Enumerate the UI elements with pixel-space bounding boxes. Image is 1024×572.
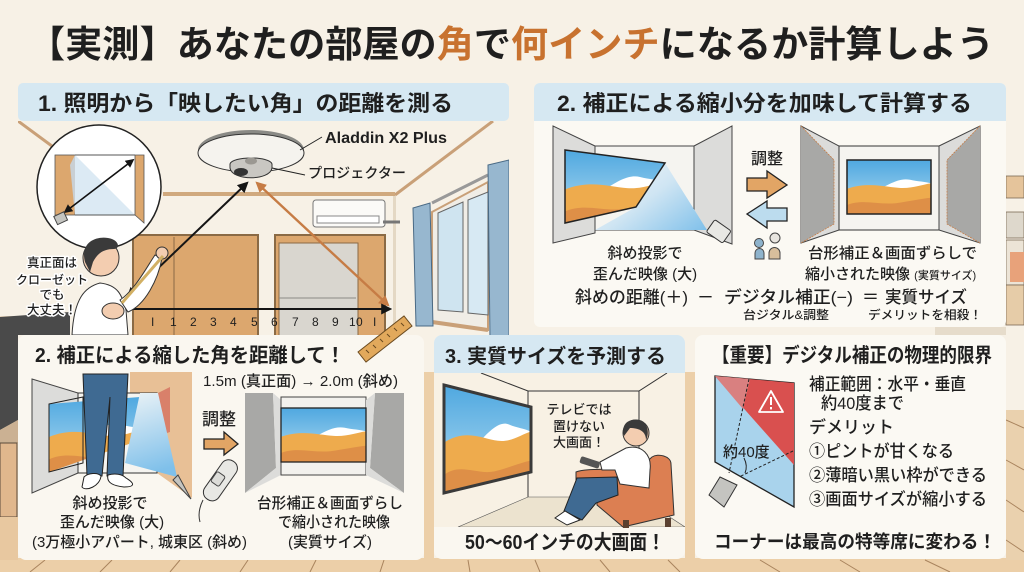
person on armchair (555, 420, 674, 528)
correction range (809, 375, 966, 413)
header: step 2: 2. 補正による縮小分を加味して計算する (557, 91, 972, 116)
caption: skewed: 斜め投影で (607, 244, 683, 262)
icon: ruler (358, 316, 412, 362)
formula: デメリットを相殺！ (868, 307, 982, 322)
panel: room measurement (16, 83, 509, 341)
inset circle: closet corner (37, 125, 161, 249)
tape scale numbers: I12345678910I (151, 315, 376, 329)
formula: デジタル補正(−) (724, 287, 853, 307)
header: step 3: 3. 実質サイズを予測する (445, 344, 666, 368)
caption: 50〜60インチの大画面！ (465, 531, 665, 554)
heading: 【重要】デジタル補正の物理的限界 (712, 343, 992, 367)
title: 【実測】あなたの部屋の角で何インチになるか計算しよう (28, 24, 994, 65)
caption: skewed: 歪んだ映像 (大) (593, 266, 697, 283)
caption: corrected: 台形補正＆画面ずらしで (808, 245, 977, 262)
callout: cannot fit a TV: 置けない (553, 419, 605, 434)
callout: closet is fine: クローゼット (16, 272, 88, 287)
arrow (204, 432, 238, 455)
panel: correction calculation (534, 83, 1006, 327)
callout: cannot fit a TV: 大画面！ (553, 435, 605, 450)
panel: corner shrink example (18, 335, 424, 560)
correction range: 補正範囲：水平・垂直 (809, 375, 966, 394)
header: step 2 (534, 83, 1006, 121)
person legs (82, 374, 133, 489)
diagram: corrected view (245, 393, 404, 493)
demerits list: ①ピントが甘くなる (809, 441, 954, 461)
formula: 実質サイズ (885, 287, 967, 307)
diagram: 40 degree limit: 約40度 (723, 444, 770, 461)
label: adjust: 調整 (202, 410, 236, 429)
callout: cannot fit a TV (546, 402, 612, 450)
caption: corrected: で縮小された映像 (278, 514, 390, 531)
distance arrows (124, 183, 390, 309)
room with large screen (434, 373, 685, 527)
caption: skewed (32, 494, 247, 551)
diagram: skewed projection (553, 126, 732, 244)
closing line: コーナーは最高の特等席に変わる！ (714, 531, 996, 552)
diagram: 40 degree limit (709, 376, 794, 507)
demerits list: デメリット (809, 417, 894, 437)
diagram: skewed view with person (32, 372, 192, 499)
icon: people (754, 233, 780, 259)
label: Aladdin X2 Plus: Aladdin X2 Plus (325, 130, 447, 147)
distance note: 1.5m (真正面) → 2.0m (斜め) (203, 372, 398, 390)
formula (575, 287, 982, 322)
caption: skewed: 斜め投影で (72, 494, 148, 512)
ceiling light with projector (198, 130, 322, 178)
formula: ＝ (862, 288, 879, 307)
demerits list: ②薄暗い黒い枠ができる (809, 465, 987, 485)
window with curtains (413, 160, 509, 340)
callout: closet is fine: 真正面は (27, 255, 77, 270)
arrow: orange (747, 171, 787, 198)
panel: predicted size (434, 335, 685, 559)
header: step 1 (18, 83, 509, 121)
formula: － (697, 288, 714, 307)
label: projector: プロジェクター (308, 165, 406, 181)
formula: 斜めの距離(＋) (575, 288, 688, 307)
correction range: 約40度まで (821, 394, 904, 413)
header: step 1: 1. 照明から「映したい角」の距離を測る (38, 91, 453, 116)
callout: cannot fit a TV: テレビでは (546, 402, 612, 417)
caption: corrected (257, 495, 403, 551)
callout: closet is fine: でも (39, 288, 65, 302)
icon: warning (759, 391, 783, 412)
caption: skewed (593, 244, 697, 283)
header: step 3 (434, 335, 685, 373)
formula: 台ジタル&調整 (743, 307, 829, 322)
label: adjust: 調整 (751, 150, 783, 168)
callout: closet is fine: 大丈夫！ (27, 302, 77, 317)
diagram: corrected projection (801, 126, 980, 243)
panel: correction limits (695, 335, 1006, 559)
room illustration (18, 121, 509, 341)
caption: corrected: (実質サイズ) (288, 533, 372, 551)
caption: skewed: (3万極小アパート, 城東区 (斜め) (32, 534, 247, 551)
demerits list: ③画面サイズが縮小する (809, 489, 987, 509)
person measuring (72, 238, 168, 335)
air conditioner (313, 200, 400, 227)
caption: corrected (805, 245, 977, 283)
caption: skewed: 歪んだ映像 (大) (60, 514, 164, 531)
caption: corrected: 縮小された映像 (実質サイズ) (805, 266, 976, 283)
arrow: blue (747, 201, 787, 228)
callout: closet is fine (16, 255, 88, 317)
icon: remote (199, 457, 241, 522)
demerits list (809, 417, 987, 509)
heading: 2. 補正による縮した角を距離して！ (35, 343, 345, 367)
caption: corrected: 台形補正＆画面ずらし (257, 495, 403, 512)
